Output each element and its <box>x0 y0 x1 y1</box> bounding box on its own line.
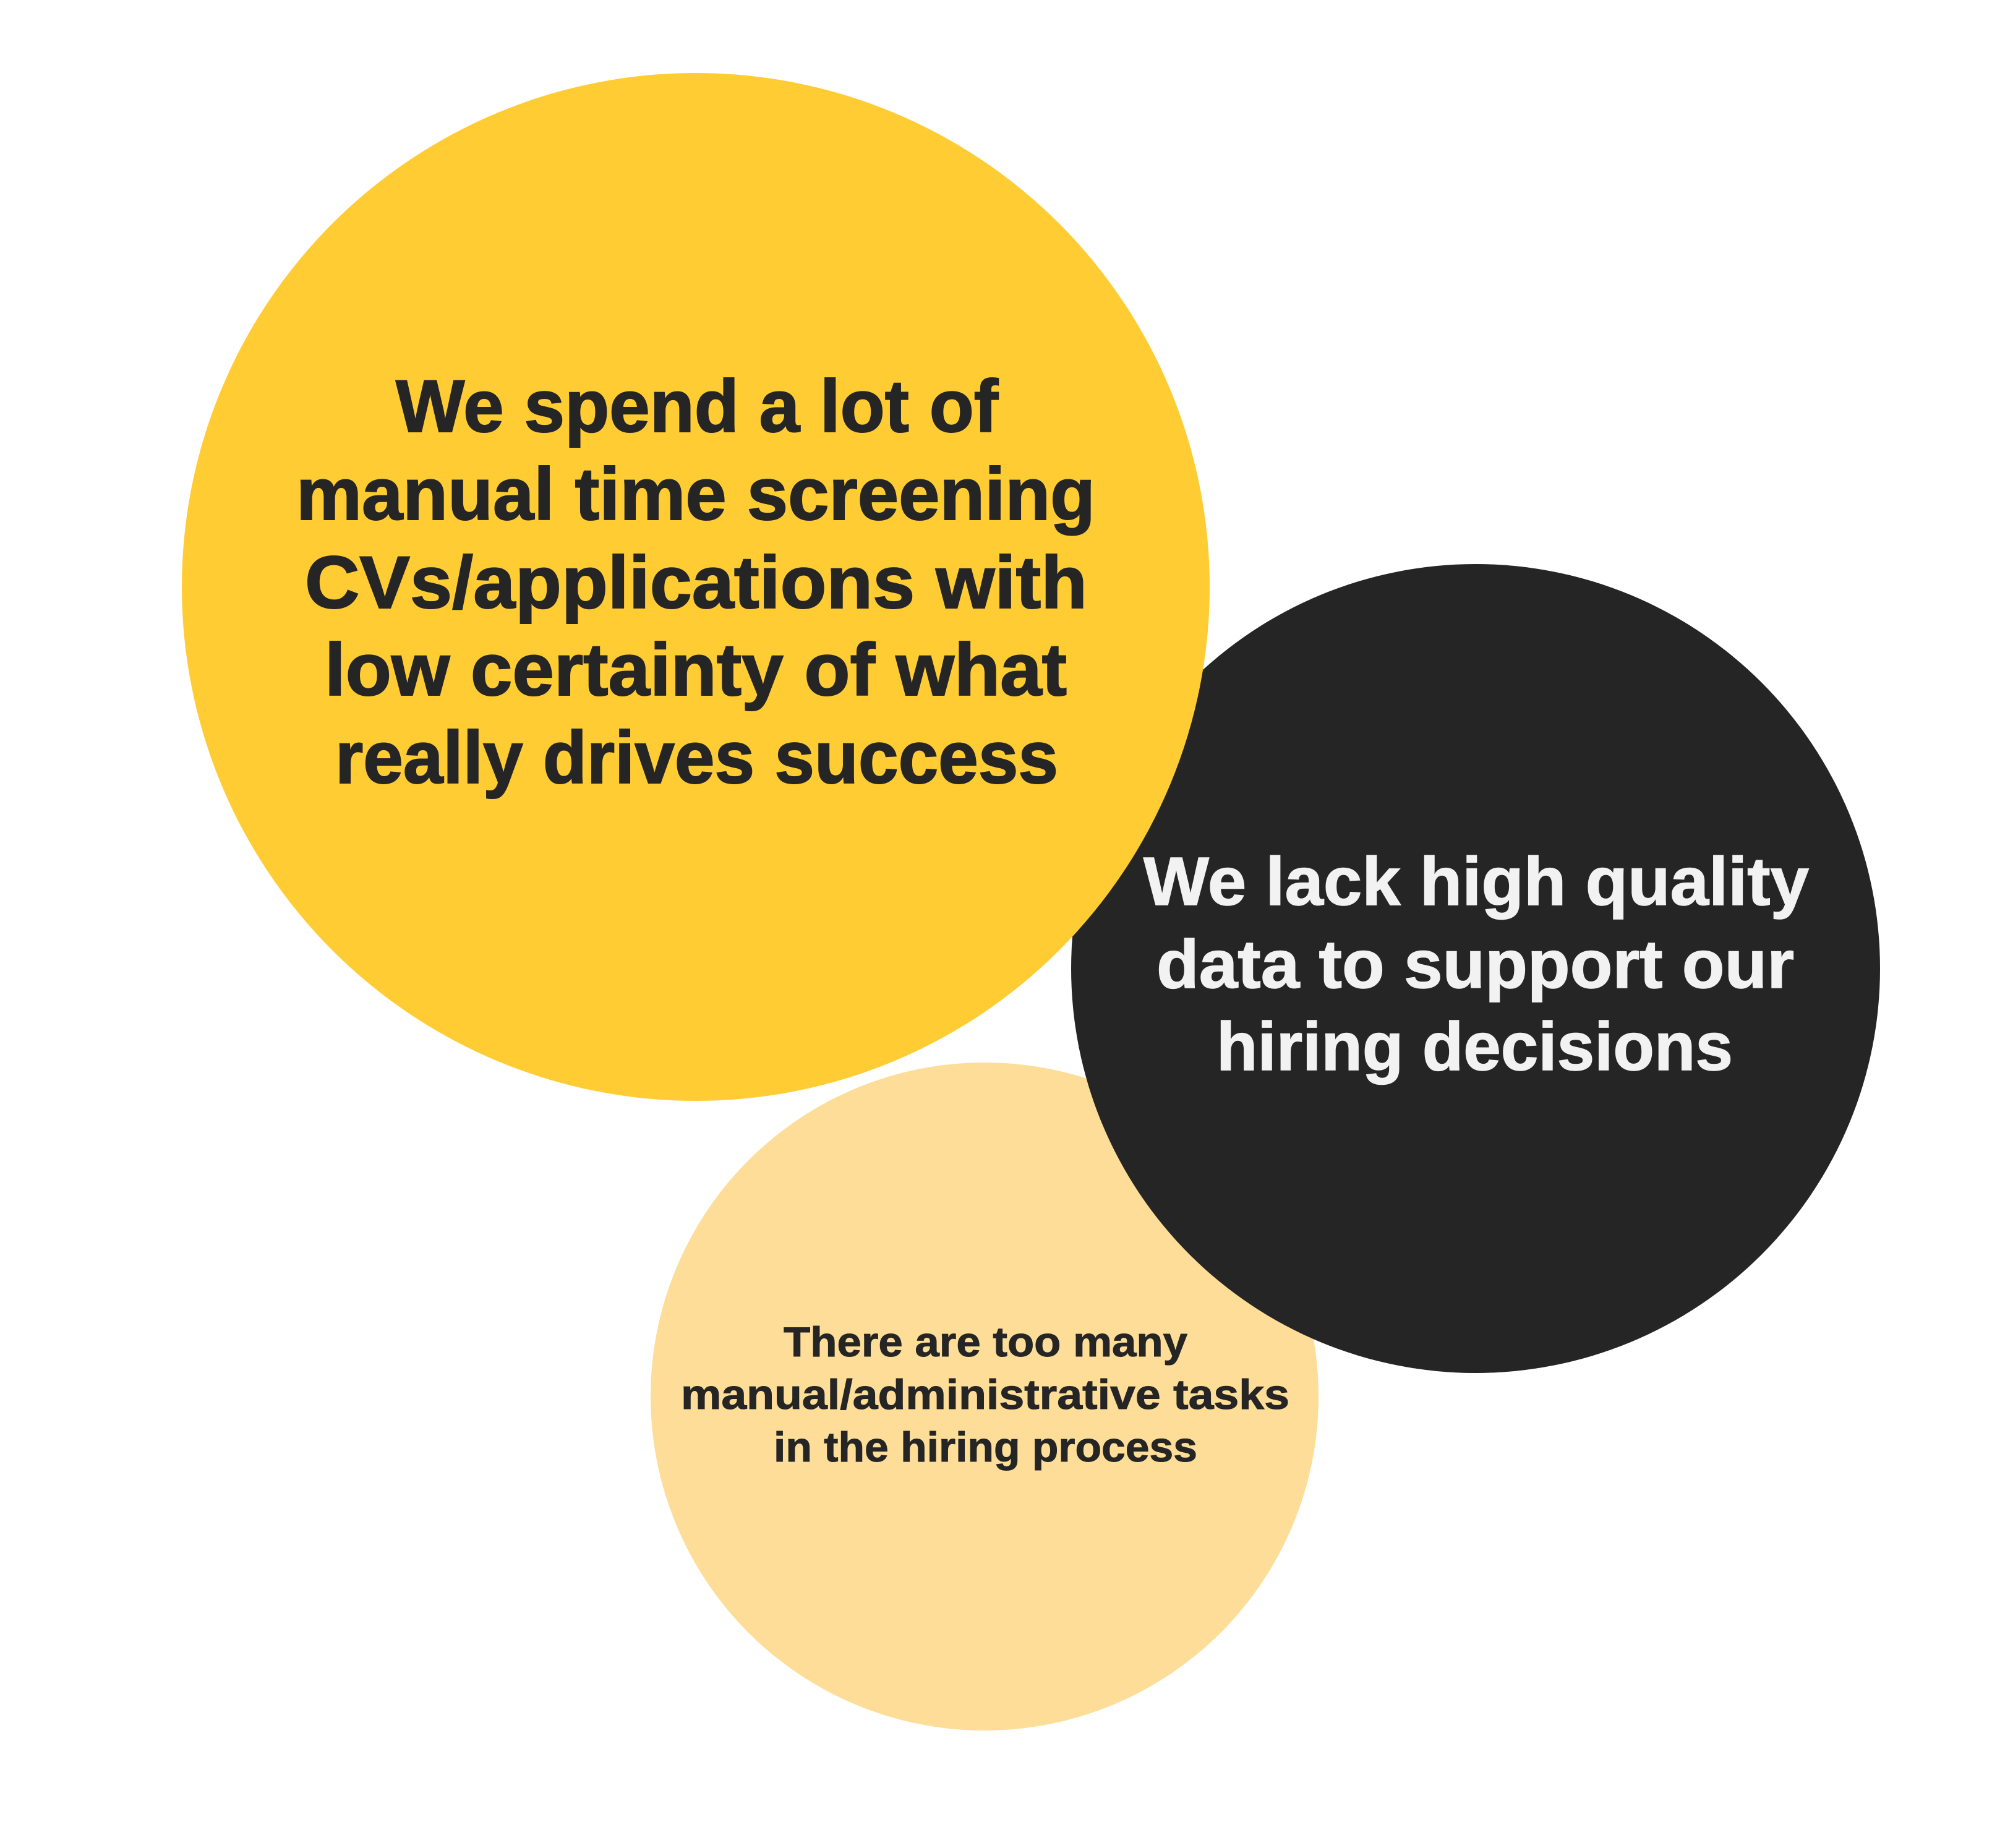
text: manual CV screening: low certainty of what <box>325 628 1067 711</box>
text: manual CV screening: really drives success <box>335 716 1058 799</box>
text: lack of high quality data: We lack high quality <box>1143 844 1809 920</box>
text: too many manual tasks: manual/administrative tasks <box>681 1371 1289 1418</box>
text: manual CV screening: manual time screening <box>296 453 1095 536</box>
text: manual CV screening <box>296 365 1095 799</box>
text: too many manual tasks: There are too many <box>784 1319 1187 1366</box>
text: lack of high quality data: data to support our <box>1156 926 1794 1003</box>
text: too many manual tasks: in the hiring process <box>774 1424 1197 1471</box>
panel: manual and administrative tasks <box>651 1063 1319 1730</box>
panel: manual CV screening <box>182 73 1210 1101</box>
text: lack of high quality data <box>1143 844 1809 1085</box>
text: manual CV screening: We spend a lot of <box>396 365 999 448</box>
dark circle <box>1071 564 1880 1373</box>
text: lack of high quality data: hiring decisions <box>1216 1009 1733 1085</box>
light yellow circle <box>651 1063 1319 1730</box>
text: manual CV screening: CVs/applications with <box>305 541 1087 624</box>
panel: lack of quality data <box>1071 564 1880 1373</box>
text: too many manual tasks <box>681 1319 1289 1471</box>
bright yellow circle <box>182 73 1210 1101</box>
